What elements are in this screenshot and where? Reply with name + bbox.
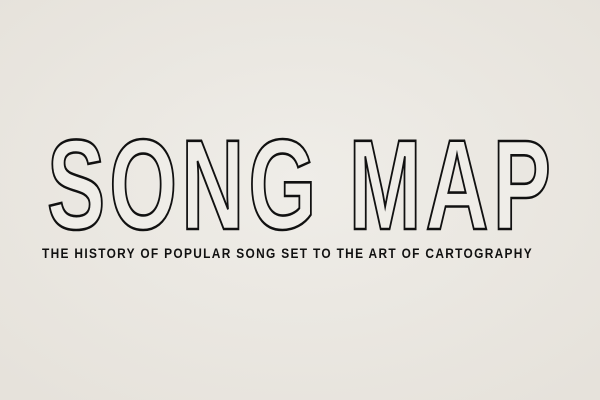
subtitle: THE HISTORY OF POPULAR SONG SET TO THE ART OF CARTOGRAPHY <box>42 246 533 261</box>
